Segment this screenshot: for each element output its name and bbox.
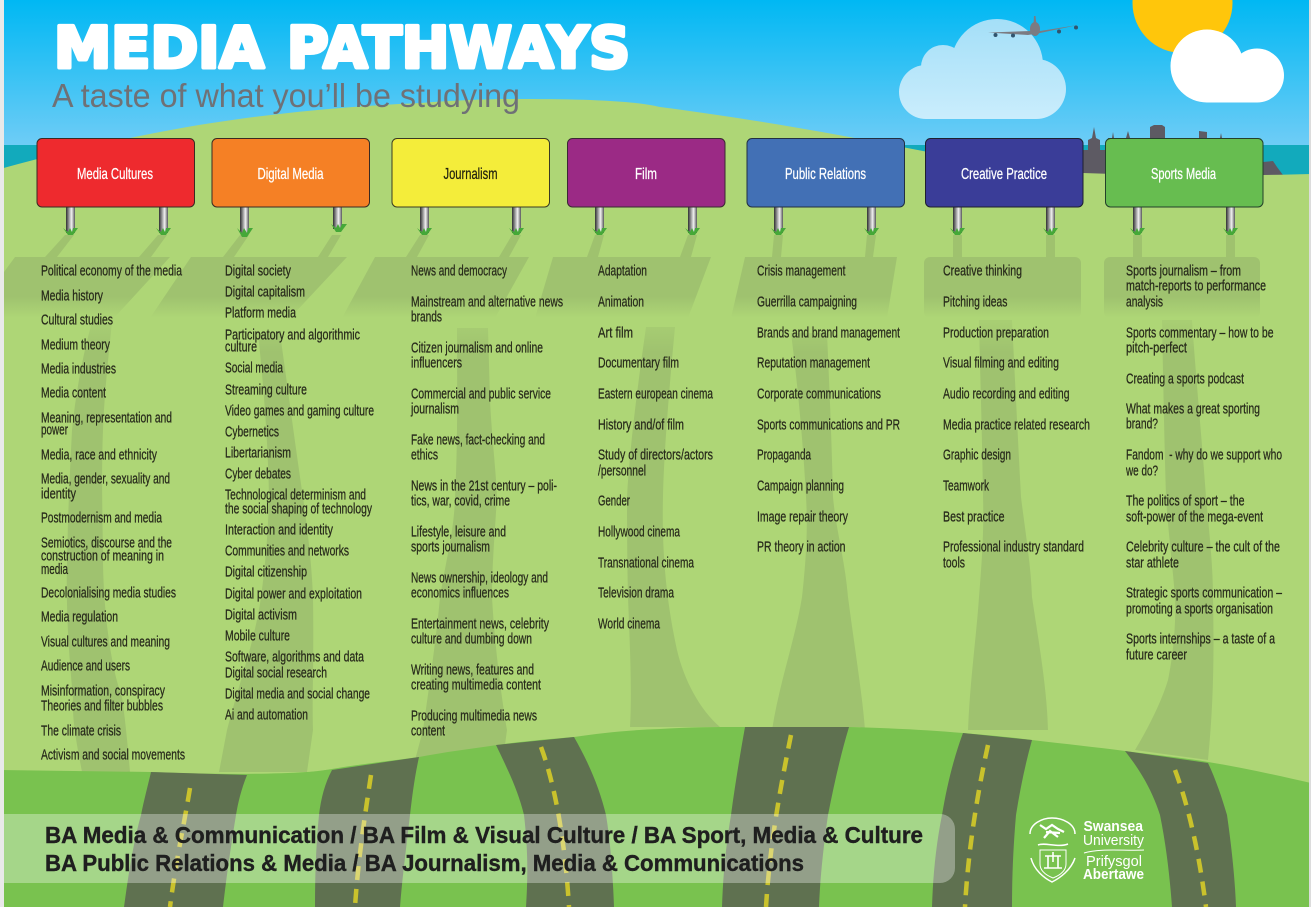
list: Journalism topics: News in the 21st century – poli-	[411, 478, 557, 494]
list: Journalism topics: Mainstream and alternative news	[411, 294, 563, 310]
list: Sports Media topics: analysis	[1126, 294, 1163, 310]
Swansea University logo	[1030, 818, 1144, 883]
list: Film topics: Eastern european cinema	[598, 386, 713, 402]
list: Media Cultures topics: Audience and users	[41, 658, 130, 674]
title	[54, 16, 630, 82]
logo wordmark: University	[1083, 832, 1144, 849]
list: Media Cultures topics: Cultural studies	[41, 312, 113, 328]
list: Journalism topics: journalism	[410, 400, 459, 418]
list: Media Cultures topics: Media regulation	[41, 608, 118, 626]
list: Sports Media topics: brand?	[1126, 416, 1158, 432]
list: Film topics: History and/of film	[598, 416, 684, 434]
list: Digital Media topics: Mobile culture	[225, 628, 290, 644]
list: Media Cultures topics: Political economy of the media	[41, 262, 182, 280]
list: Sports Media topics: Sports journalism – from	[1126, 262, 1241, 280]
list: Media Cultures topics: Decolonialising media studies	[41, 584, 176, 602]
list: Journalism topics: Producing multimedia news	[411, 708, 537, 724]
road 6	[1125, 751, 1236, 907]
list: Digital Media topics: Software, algorithms and data	[225, 648, 364, 666]
list: Public Relations topics: Campaign planning	[757, 478, 844, 494]
list: Public Relations topics: Guerrilla campaigning	[757, 294, 857, 310]
list: Media Cultures topics: construction of meaning in	[41, 548, 164, 564]
sign: Public Relations	[747, 138, 904, 207]
logo wordmark: Swansea	[1084, 818, 1144, 835]
list: Film topics: Animation	[598, 294, 644, 310]
road 1	[124, 772, 247, 907]
list: Creative Practice topics: Visual filming and editing	[943, 354, 1059, 372]
list: Sports Media topics: future career	[1126, 646, 1187, 664]
list: Media Cultures topics: Media history	[41, 288, 103, 304]
list: Media Cultures topics: Media, gender, sexuality and	[41, 470, 170, 488]
list: Film topics: World cinema	[598, 616, 660, 632]
list: Digital Media topics: Digital media and social change	[225, 686, 370, 702]
list: Film topics: Gender	[598, 492, 630, 510]
list: Digital Media topics: Social media	[225, 360, 283, 376]
sign: Sports Media: Sports Media	[1151, 166, 1216, 183]
sign: Digital Media: Digital Media	[258, 166, 324, 183]
list: Digital Media topics: Video games and gaming culture	[225, 402, 374, 420]
sky background	[0, 0, 1311, 150]
list: Media Cultures topics: Media content	[41, 384, 107, 402]
list: Media Cultures topics: The climate crisis	[41, 722, 121, 740]
sign: Media Cultures: Media Cultures	[77, 166, 153, 183]
list: Journalism topics: Writing news, features and	[411, 662, 534, 678]
list: Journalism topics: brands	[411, 308, 442, 326]
list: Media Cultures topics: Media industries	[41, 360, 116, 378]
list: Public Relations topics: Propaganda	[757, 446, 811, 464]
logo wordmark: Abertawe	[1083, 866, 1144, 883]
list: Journalism topics: Citizen journalism and online	[411, 340, 543, 356]
list: Journalism topics: culture and dumbing down	[411, 630, 532, 648]
list: Journalism topics: Entertainment news, celebrity	[411, 616, 549, 632]
list: Media Cultures topics: media	[41, 561, 68, 578]
road 5	[932, 733, 1032, 907]
list: Journalism topics: News and democracy	[411, 262, 507, 280]
road 3	[496, 737, 614, 907]
icon: aeroplane	[988, 16, 1078, 38]
shadow: winding roads	[67, 320, 1213, 772]
list: Journalism topics: News ownership, ideology and	[411, 570, 548, 586]
list: Sports Media topics: The politics of sport – the	[1126, 492, 1244, 510]
list: Media Cultures topics	[41, 262, 185, 764]
list: Film topics	[598, 262, 713, 632]
sign: Digital Media	[212, 138, 370, 207]
city skyline	[1080, 125, 1284, 178]
list: Journalism topics: economics influences	[411, 584, 509, 602]
list: Media Cultures topics: Meaning, representation and	[41, 410, 172, 426]
sign: Creative Practice	[926, 138, 1083, 207]
title: PATHWAYS	[287, 16, 630, 82]
list: Creative Practice topics: Pitching ideas	[943, 294, 1008, 310]
icon: pale blue cloud	[899, 19, 1066, 119]
list: Media Cultures topics: Activism and social movements	[41, 746, 185, 764]
sea	[0, 145, 1311, 185]
degree courses banner	[0, 814, 955, 883]
list: Media Cultures topics: Medium theory	[41, 336, 110, 354]
shadow: posts	[45, 235, 1235, 257]
list: Public Relations topics: Corporate communications	[757, 386, 881, 402]
sign: Creative Practice: Creative Practice	[961, 166, 1047, 183]
logo wordmark	[1083, 818, 1144, 883]
list: Creative Practice topics: Media practice related research	[943, 416, 1090, 434]
list: Media Cultures topics: Media, race and ethnicity	[41, 446, 157, 464]
list: Public Relations topics	[757, 262, 901, 556]
list: Digital Media topics: Digital capitalism	[225, 284, 305, 300]
degree courses banner: BA Media & Communication / BA Film & Visual Culture / BA Sport, Media & Culture	[45, 822, 923, 848]
sign: Film: Film	[635, 166, 657, 183]
list: Journalism topics: sports journalism	[411, 538, 490, 556]
list: Journalism topics: creating multimedia content	[411, 676, 542, 694]
sign: Journalism	[392, 138, 550, 207]
list: Media Cultures topics: Misinformation, conspiracy	[41, 682, 165, 700]
list: Sports Media topics: pitch-perfect	[1126, 340, 1188, 356]
road centre dashes	[170, 735, 1206, 907]
title: MEDIA	[54, 16, 264, 82]
list: Journalism topics: Lifestyle, leisure and	[411, 524, 506, 540]
list: Creative Practice topics: Production preparation	[943, 324, 1049, 342]
list: Creative Practice topics: tools	[943, 554, 965, 572]
list: Creative Practice topics: Graphic design	[943, 446, 1011, 464]
list: Digital Media topics: Interaction and identity	[225, 522, 333, 538]
list: Sports Media topics: Creating a sports podcast	[1126, 370, 1245, 388]
list: Film topics: Television drama	[598, 584, 674, 602]
icon: sun	[1132, 0, 1232, 53]
list: Journalism topics: Fake news, fact-checking and	[411, 432, 545, 448]
sign: Public Relations: Public Relations	[785, 166, 866, 183]
dark green foreground hill	[0, 727, 1311, 907]
list: Journalism topics	[410, 262, 563, 740]
sign: Film	[568, 138, 725, 207]
road 2	[315, 757, 419, 907]
list: Digital Media topics: the social shaping of technology	[225, 500, 372, 518]
list: Journalism topics: influencers	[411, 354, 462, 372]
list: Film topics: Adaptation	[598, 262, 647, 280]
sign: Journalism: Journalism	[444, 166, 498, 183]
list: Film topics: Study of directors/actors	[598, 446, 713, 464]
list: Digital Media topics: Technological determinism and	[225, 486, 366, 504]
list: Digital Media topics: Digital activism	[225, 606, 297, 624]
list: Journalism topics: content	[411, 722, 446, 740]
list: Sports Media topics: star athlete	[1126, 554, 1179, 572]
list: Media Cultures topics: identity	[41, 486, 76, 502]
list: Public Relations topics: PR theory in action	[757, 538, 846, 556]
list: Digital Media topics: Cybernetics	[225, 424, 279, 440]
list: Digital Media topics: Digital society	[225, 262, 291, 280]
road shadows on hill	[4, 235, 1260, 772]
list: Creative Practice topics: Best practice	[943, 508, 1004, 526]
list: Media Cultures topics: Postmodernism and media	[41, 510, 162, 526]
list: Digital Media topics: Ai and automation	[225, 706, 308, 724]
list: Sports Media topics: we do?	[1125, 462, 1158, 480]
list: Media Cultures topics: Semiotics, discourse and the	[41, 534, 172, 552]
sign: Sports Media	[1106, 138, 1263, 207]
list: Digital Media topics: Cyber debates	[225, 466, 291, 482]
list: Sports Media topics	[1125, 262, 1282, 664]
list: Digital Media topics: Digital power and exploitation	[225, 586, 362, 602]
list: Digital Media topics: Libertarianism	[225, 444, 291, 462]
list: Public Relations topics: Brands and brand management	[757, 324, 901, 342]
list: Media Cultures topics: Theories and filter bubbles	[41, 698, 163, 714]
sign posts and grass	[63, 207, 1238, 237]
roads	[124, 727, 1236, 907]
list: Media Cultures topics: power	[41, 422, 68, 438]
icon: white cloud	[1170, 30, 1284, 102]
list: Digital Media topics: Streaming culture	[225, 382, 307, 398]
subtitle: A taste of what you’ll be studying	[52, 77, 520, 114]
road 4	[722, 727, 849, 907]
list: Film topics: Art film	[598, 324, 633, 342]
list: Public Relations topics: Crisis management	[757, 262, 846, 280]
list: Digital Media topics: Digital citizenship	[225, 564, 307, 580]
sign: Media Cultures	[37, 138, 194, 207]
list: Public Relations topics: Reputation management	[757, 354, 871, 372]
list: Digital Media topics: Communities and networks	[225, 542, 349, 560]
list: Creative Practice topics: Audio recording and editing	[943, 386, 1070, 402]
list: Creative Practice topics: Creative thinking	[943, 262, 1022, 280]
list: Journalism topics: tics, war, covid, crime	[411, 492, 510, 510]
list: Film topics: Transnational cinema	[598, 554, 694, 572]
list: Journalism topics: ethics	[411, 446, 438, 464]
list: Creative Practice topics: Teamwork	[943, 478, 989, 494]
list: Journalism topics: Commercial and public service	[411, 386, 551, 402]
list: Digital Media topics: culture	[225, 338, 257, 356]
light green hill	[0, 99, 1311, 800]
list: Creative Practice topics: Professional industry standard	[943, 538, 1084, 556]
list: Creative Practice topics	[943, 262, 1090, 572]
icon: university crest	[1030, 818, 1075, 882]
list: Film topics: /personnel	[598, 462, 646, 480]
list: Public Relations topics: Sports communications and PR	[757, 416, 900, 434]
list: Digital Media topics: Digital social research	[225, 664, 327, 682]
logo wordmark: Prifysgol	[1086, 853, 1142, 870]
shadow: column panels	[4, 257, 1260, 318]
list: Film topics: Documentary film	[598, 354, 679, 372]
degree courses banner: BA Public Relations & Media / BA Journalism, Media & Communications	[45, 850, 804, 876]
list: Digital Media topics: Participatory and algorithmic	[225, 326, 360, 344]
list: Public Relations topics: Image repair theory	[757, 508, 848, 526]
list: Digital Media topics: Platform media	[225, 304, 296, 322]
list: Film topics: Hollywood cinema	[598, 524, 680, 540]
list: Digital Media topics	[225, 262, 374, 724]
list: Media Cultures topics: Visual cultures and meaning	[41, 634, 170, 650]
